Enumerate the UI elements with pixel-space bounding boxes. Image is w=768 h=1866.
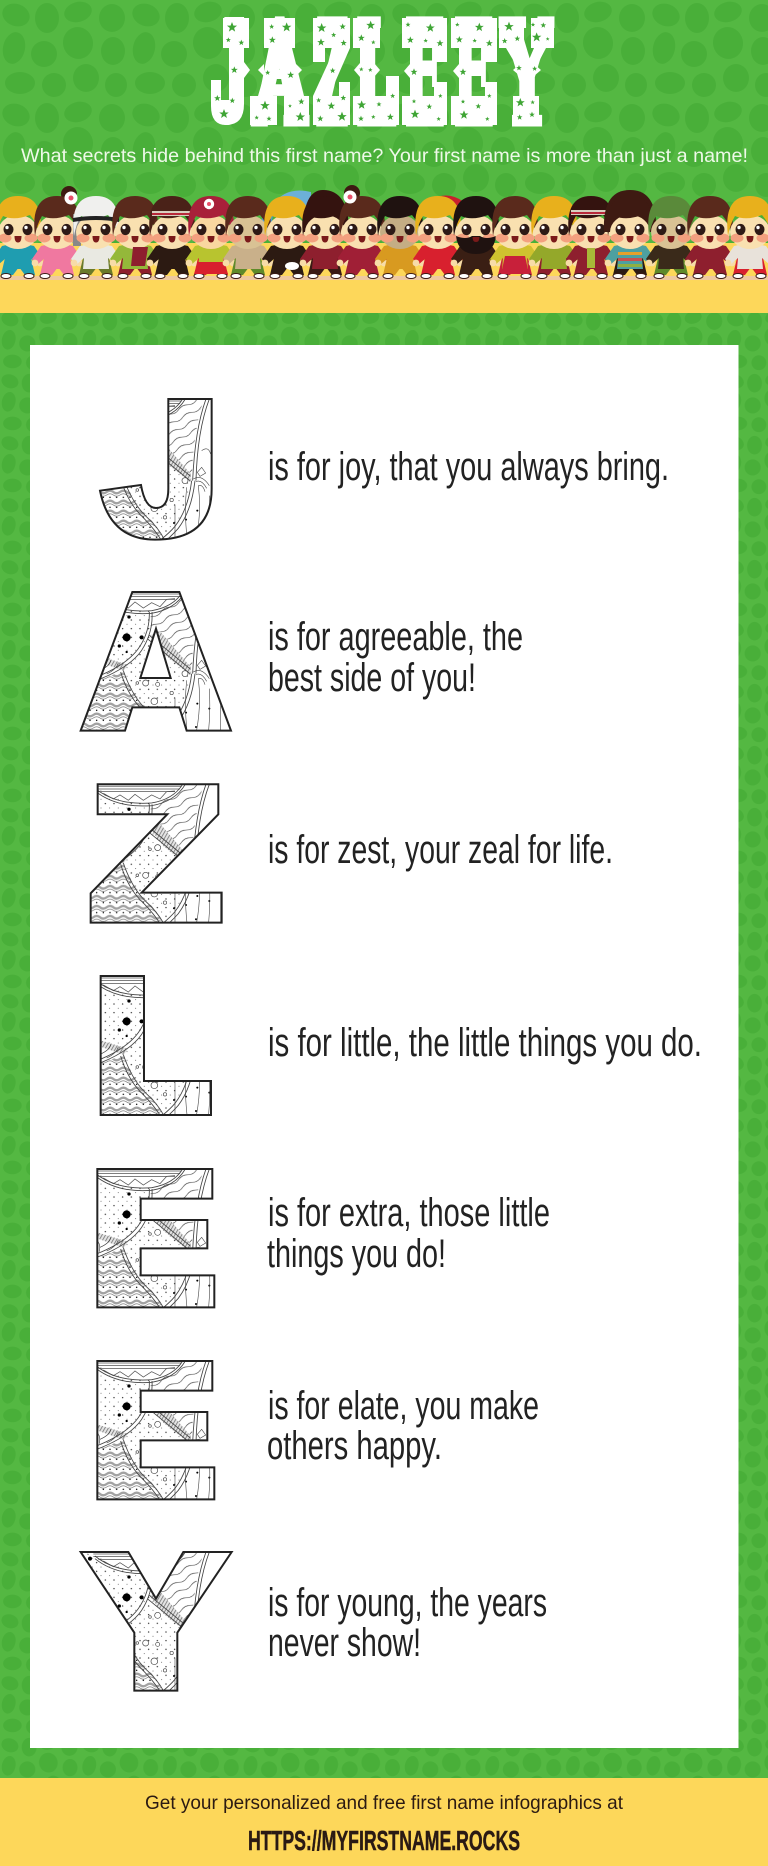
footer text: Get your personalized and free first name infographics at xyxy=(145,1792,624,1814)
text: E lines xyxy=(267,1191,550,1276)
text: A lines xyxy=(268,615,523,700)
character: blonde, blue overalls xyxy=(0,196,43,278)
character: blonde with red cap, red apron xyxy=(413,195,464,278)
second letter E row xyxy=(96,1360,538,1500)
character: white headdress xyxy=(71,196,121,278)
character: tall dark hair, red outfit xyxy=(300,190,350,278)
icon: letter J xyxy=(98,398,213,541)
letter Z row xyxy=(90,783,610,924)
text: Y lines: never show! xyxy=(268,1621,421,1665)
text: Y lines xyxy=(268,1581,547,1665)
text: Y lines: is for young, the years xyxy=(268,1581,547,1625)
footer url: HTTPS://MYFIRSTNAME.ROCKS xyxy=(248,1825,520,1856)
letter E row xyxy=(96,1168,549,1308)
character: pink kimono with flower xyxy=(32,186,82,278)
icon: letter Y xyxy=(78,1551,234,1692)
title: JAZLEEY xyxy=(211,0,554,160)
character: dark hair, orange outfit xyxy=(375,196,425,278)
letter Y row xyxy=(60,1549,547,1699)
subtitle: What secrets hide behind this first name? Your first name is more than just a name! xyxy=(21,145,748,167)
text: A lines: best side of you! xyxy=(268,656,476,700)
character: headband, maroon with green front xyxy=(566,196,616,278)
character: black hair and beard xyxy=(451,196,501,278)
letter A row xyxy=(79,591,522,732)
character: blonde, maroon and green xyxy=(529,196,579,278)
text: Z line: is for zest, your zeal for life. xyxy=(268,828,613,872)
icon: letter L xyxy=(100,975,212,1116)
character: long dark hair, striped top xyxy=(604,190,656,278)
character: blonde with blue cap, black and white xyxy=(262,190,312,278)
yellow band behind characters xyxy=(0,243,768,313)
text: E lines: things you do! xyxy=(267,1232,446,1276)
character: polka dot skirt xyxy=(490,196,540,278)
icon: letter A xyxy=(79,591,232,732)
character: blonde, red and white xyxy=(725,196,768,278)
character row xyxy=(0,185,768,278)
panel: white card xyxy=(30,345,738,1748)
character: tan skin, grass skirt xyxy=(223,196,273,278)
footer band xyxy=(0,1778,768,1866)
text: second E lines: is for elate, you make xyxy=(268,1384,539,1428)
text: second E lines xyxy=(267,1384,539,1468)
character: headband, black outfit xyxy=(147,196,197,278)
character: green headdress, grass skirt xyxy=(646,196,696,278)
character: green and maroon outfit xyxy=(110,196,160,278)
icon: letter E xyxy=(96,1168,216,1308)
text: A lines: is for agreeable, the xyxy=(268,615,523,659)
letter J row xyxy=(98,398,666,541)
icon: second letter E xyxy=(96,1360,216,1500)
text: second E lines: others happy. xyxy=(267,1424,442,1468)
character: maroon hat, red skirt xyxy=(186,196,236,278)
character: maroon outfit xyxy=(685,196,735,278)
letter L row xyxy=(100,975,700,1116)
text: E lines: is for extra, those little xyxy=(268,1191,550,1235)
character: maroon outfit with flower xyxy=(337,185,387,278)
icon: letter Z xyxy=(90,783,223,924)
